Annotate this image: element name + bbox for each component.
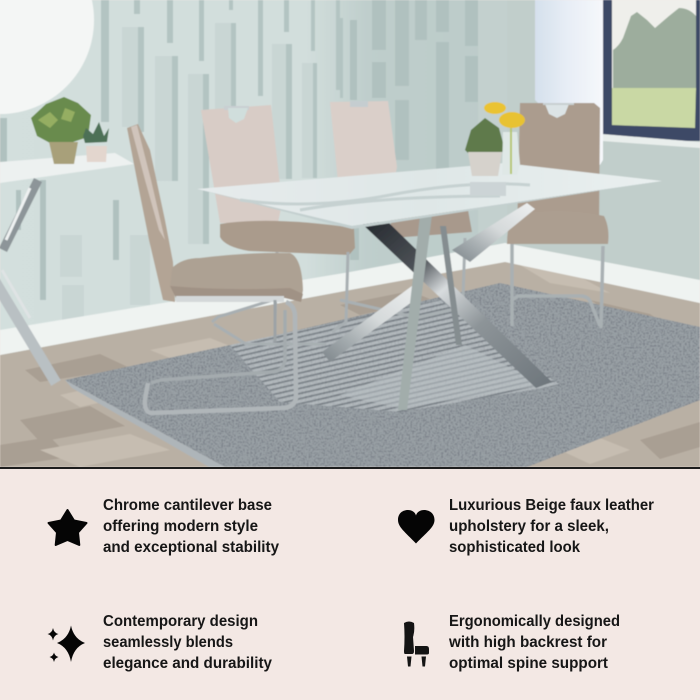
text: design description: elegance and durability xyxy=(103,655,272,672)
text: design description: Contemporary design xyxy=(103,613,258,630)
feature 2: upholstery xyxy=(398,497,654,556)
icon: small succulent xyxy=(83,122,109,162)
rug xyxy=(65,283,700,467)
text: chrome base description: offering modern style xyxy=(103,518,258,535)
text: ergonomic description: with high backrest for xyxy=(448,634,607,651)
text: upholstery description: sophisticated look xyxy=(449,539,580,556)
text: upholstery description: upholstery for a sleek, xyxy=(449,518,609,535)
feature 1: chrome base xyxy=(48,497,279,556)
right wall xyxy=(507,0,700,285)
vase and flowers xyxy=(465,102,525,176)
curtain xyxy=(535,0,603,165)
side chair 2 xyxy=(201,105,355,344)
text: ergonomic description: Ergonomically designed xyxy=(449,613,620,630)
mirror xyxy=(0,0,94,114)
front chair 1 xyxy=(127,124,303,413)
far chair 4 xyxy=(507,103,608,328)
feature 4: ergonomic backrest xyxy=(404,613,620,672)
icon: high-back chair xyxy=(404,622,429,666)
text: ergonomic description xyxy=(448,613,620,672)
window xyxy=(602,0,700,148)
skirting board xyxy=(0,243,700,355)
text: upholstery description: Luxurious Beige faux leather xyxy=(449,497,654,514)
icon: heart xyxy=(398,510,434,544)
text: ergonomic description: optimal spine support xyxy=(449,655,608,672)
console table with plants xyxy=(0,97,134,383)
table top xyxy=(197,163,662,229)
table base: crossed chrome blades xyxy=(322,203,552,410)
text: chrome base description xyxy=(103,497,279,556)
text: chrome base description: Chrome cantilever base xyxy=(103,497,272,514)
text: upholstery description xyxy=(449,497,654,556)
feature 3: contemporary design xyxy=(48,613,272,672)
text: design description: seamlessly blends xyxy=(103,634,233,651)
text: chrome base description: and exceptional stability xyxy=(103,539,279,556)
photo: dining room scene xyxy=(0,0,700,467)
icon: potted green plant xyxy=(31,97,91,164)
floor xyxy=(0,260,700,467)
icon: star xyxy=(48,510,86,545)
photo bottom border xyxy=(0,467,700,469)
icon: sparkles xyxy=(48,626,85,662)
text: design description xyxy=(103,613,272,672)
wall with panels xyxy=(0,0,605,360)
far chair 3 xyxy=(330,101,472,318)
